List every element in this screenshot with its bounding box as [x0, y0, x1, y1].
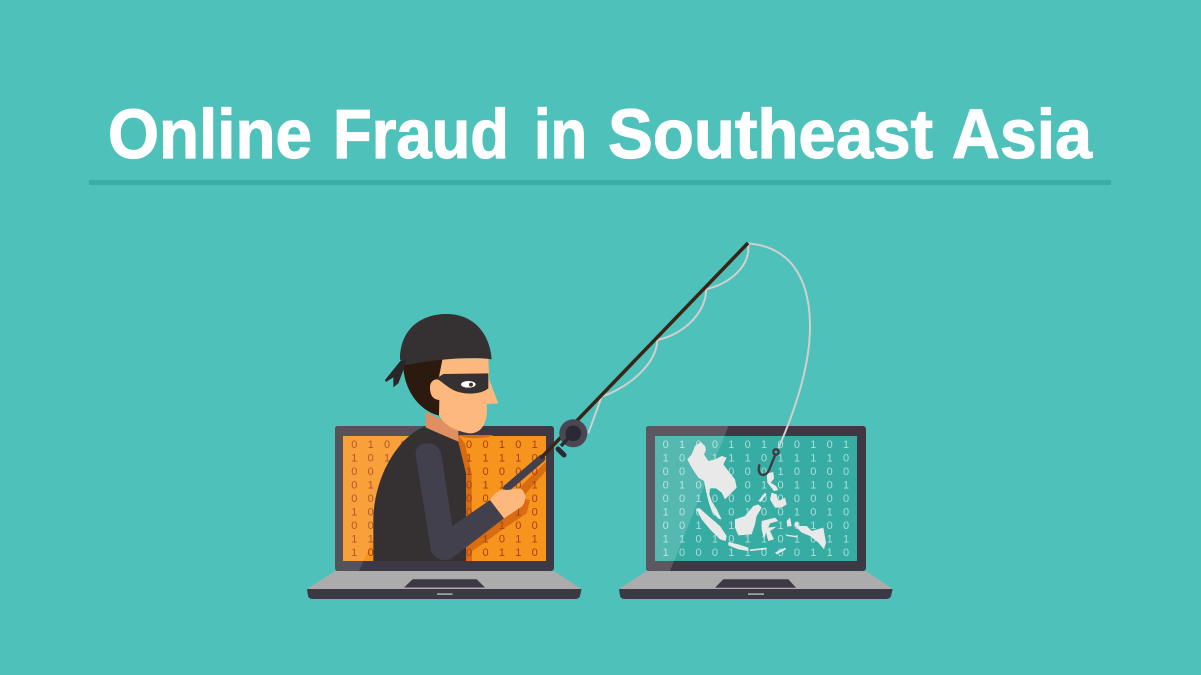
neck	[426, 412, 458, 443]
reel	[558, 419, 587, 455]
arm	[416, 443, 504, 560]
right screen binary digits	[663, 439, 849, 559]
right screen binary digits: 100001001010	[663, 506, 849, 518]
right laptop	[619, 426, 893, 599]
left screen binary digits: 000000010000	[351, 466, 538, 478]
right laptop frame	[646, 426, 866, 571]
right laptop screen	[655, 436, 857, 561]
left laptop base	[307, 571, 582, 599]
bandana cap	[400, 314, 492, 365]
right screen binary digits: 110101101011	[663, 534, 849, 546]
hand	[490, 488, 525, 518]
right screen binary digits: 000000010000	[663, 466, 849, 478]
eye	[461, 381, 476, 388]
left screen binary digits: 010010100101	[351, 439, 538, 451]
left laptop	[307, 426, 582, 599]
thief figure	[373, 314, 542, 561]
left laptop screen	[343, 436, 546, 561]
left screen binary digits: 001000000000	[351, 493, 538, 505]
title	[108, 95, 1093, 173]
bandana knot	[385, 361, 406, 387]
title: Online	[108, 95, 312, 173]
right screen binary digits: 001110010100	[663, 520, 849, 532]
right screen binary digits: 100011000110	[663, 547, 849, 559]
hair	[403, 358, 443, 416]
left screen binary digits: 001110010100	[351, 520, 538, 532]
fishing rod	[541, 243, 748, 458]
fishing hook	[759, 449, 779, 475]
face	[430, 358, 498, 433]
fishing line	[588, 243, 810, 448]
left laptop frame	[335, 426, 554, 571]
right laptop base	[619, 571, 893, 599]
left screen binary digits: 100001001010	[351, 506, 538, 518]
title: Fraud	[333, 95, 509, 173]
left screen binary digits: 100011000110	[351, 547, 538, 559]
title: in	[534, 95, 587, 173]
rod handle	[507, 458, 542, 488]
figure shadow on screen	[458, 435, 546, 561]
title: Southeast	[608, 95, 933, 173]
map of Southeast Asia	[687, 442, 826, 554]
right screen binary digits: 001000000000	[663, 493, 849, 505]
left screen binary digits: 010100101101	[351, 480, 538, 492]
title: Asia	[952, 95, 1093, 173]
right screen binary digits: 010010100101	[663, 439, 849, 451]
right screen binary digits: 101111011110	[663, 452, 849, 464]
torso	[373, 427, 466, 561]
left screen binary digits	[351, 439, 538, 559]
left screen binary digits: 101111011110	[351, 452, 538, 464]
right screen binary digits: 010100101101	[663, 480, 849, 492]
eye mask	[437, 373, 488, 394]
left screen binary digits: 110101101011	[351, 534, 538, 546]
